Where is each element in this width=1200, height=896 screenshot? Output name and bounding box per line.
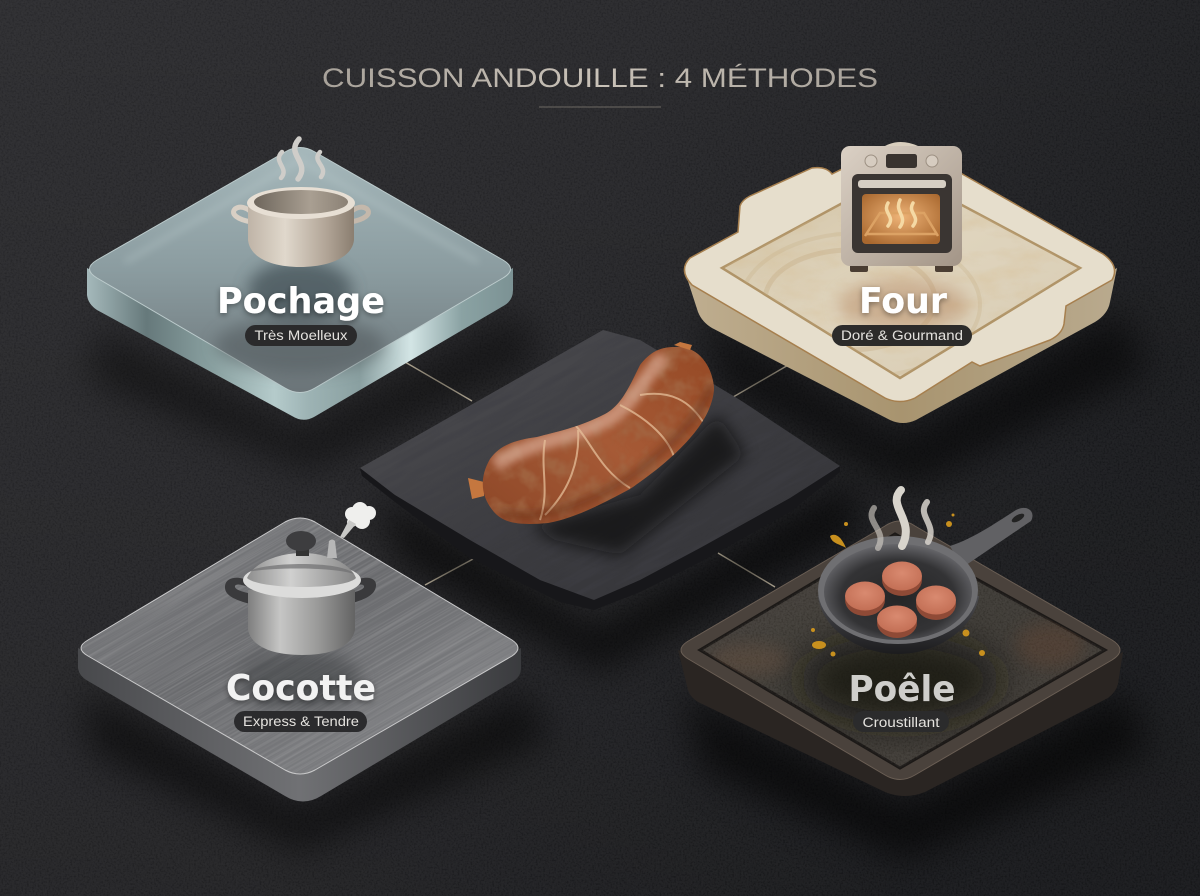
sausage knot <box>468 478 484 499</box>
pill: Très Moelleux: Très Moelleux <box>254 328 348 343</box>
slate texture <box>734 396 735 397</box>
panel: Pochage glass plate <box>87 139 513 420</box>
glass plate edge <box>87 268 513 420</box>
icon: steam <box>279 139 323 179</box>
steel top <box>81 518 518 774</box>
icon: pan handle <box>950 508 1033 568</box>
sausage slices <box>845 562 956 638</box>
steel side <box>78 648 521 802</box>
icon: pot <box>234 187 368 267</box>
sausage tie <box>674 342 692 350</box>
sausage <box>482 346 714 524</box>
glass plate top <box>90 148 510 392</box>
label: Poêle: Poêle <box>848 669 956 710</box>
tray texture <box>690 530 1110 770</box>
tray rim <box>681 521 1120 780</box>
panel: Cocotte steel plate <box>78 502 521 802</box>
label glow <box>838 279 968 331</box>
label: Four: Four <box>859 281 947 322</box>
dish rim <box>684 145 1115 402</box>
panel: Poêle iron tray <box>678 490 1123 796</box>
connector lines <box>405 362 790 587</box>
panel: Four ceramic dish <box>684 142 1117 423</box>
glass inner bevel <box>125 160 478 262</box>
pot reflection <box>238 650 362 710</box>
label: Pochage: Pochage <box>217 281 385 322</box>
title: CUISSON ANDOUILLE : 4 MÉTHODES <box>322 63 878 93</box>
brushed metal <box>82 519 515 772</box>
tray floor <box>700 534 1105 768</box>
icon: pressure cooker <box>225 531 376 655</box>
label: Cocotte: Cocotte <box>226 668 376 709</box>
dish outer side <box>685 268 1117 423</box>
sausage shadow <box>530 415 745 555</box>
slate top <box>360 330 840 600</box>
pill: Express & Tendre <box>234 711 367 732</box>
icon: oven <box>841 142 962 272</box>
panel: central slate <box>360 330 840 610</box>
icon: frying pan <box>818 536 979 654</box>
pill: Croustillant: Croustillant <box>862 715 940 730</box>
plate shadows <box>85 310 1150 860</box>
pill: Doré & Gourmand: Doré & Gourmand <box>841 328 963 343</box>
icon: oil droplets <box>811 514 985 656</box>
icon: steam <box>872 490 931 548</box>
pill: Doré & Gourmand <box>832 325 972 346</box>
pill: Croustillant <box>853 711 949 732</box>
icon: steam cloud <box>340 502 376 538</box>
pill: Très Moelleux <box>245 325 357 346</box>
dish inner basin <box>722 172 1080 378</box>
tray side <box>678 650 1123 796</box>
text shading <box>215 317 385 373</box>
pot reflection <box>248 260 352 320</box>
pill: Express & Tendre: Express & Tendre <box>243 714 359 729</box>
slate edge <box>360 466 840 610</box>
glaze swirl <box>731 214 1046 375</box>
